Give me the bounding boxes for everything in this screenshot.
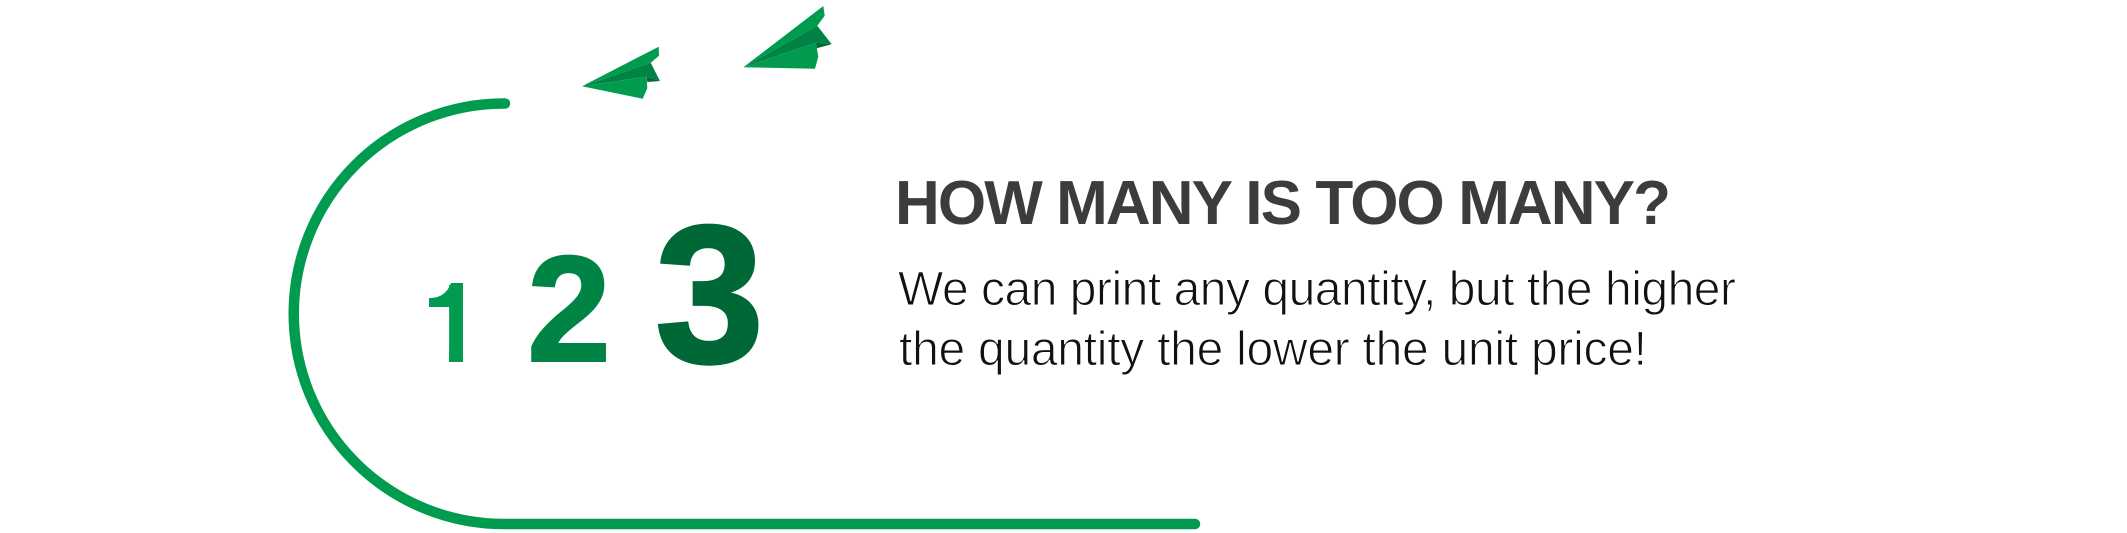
icon: large paper plane xyxy=(743,6,832,69)
icon: small paper plane xyxy=(582,47,660,99)
heading: HOW MANY IS TOO MANY? xyxy=(895,169,1671,238)
number 1 xyxy=(429,283,463,362)
arc and line: curved green track xyxy=(294,104,1195,524)
number 2: 2 xyxy=(527,224,611,393)
number 1: 1 xyxy=(423,261,485,386)
number 3: 3 xyxy=(655,185,764,404)
body text: the quantity the lower the unit price! xyxy=(899,323,1647,376)
body text xyxy=(898,263,1736,376)
body text: We can print any quantity, but the higher xyxy=(898,263,1736,316)
